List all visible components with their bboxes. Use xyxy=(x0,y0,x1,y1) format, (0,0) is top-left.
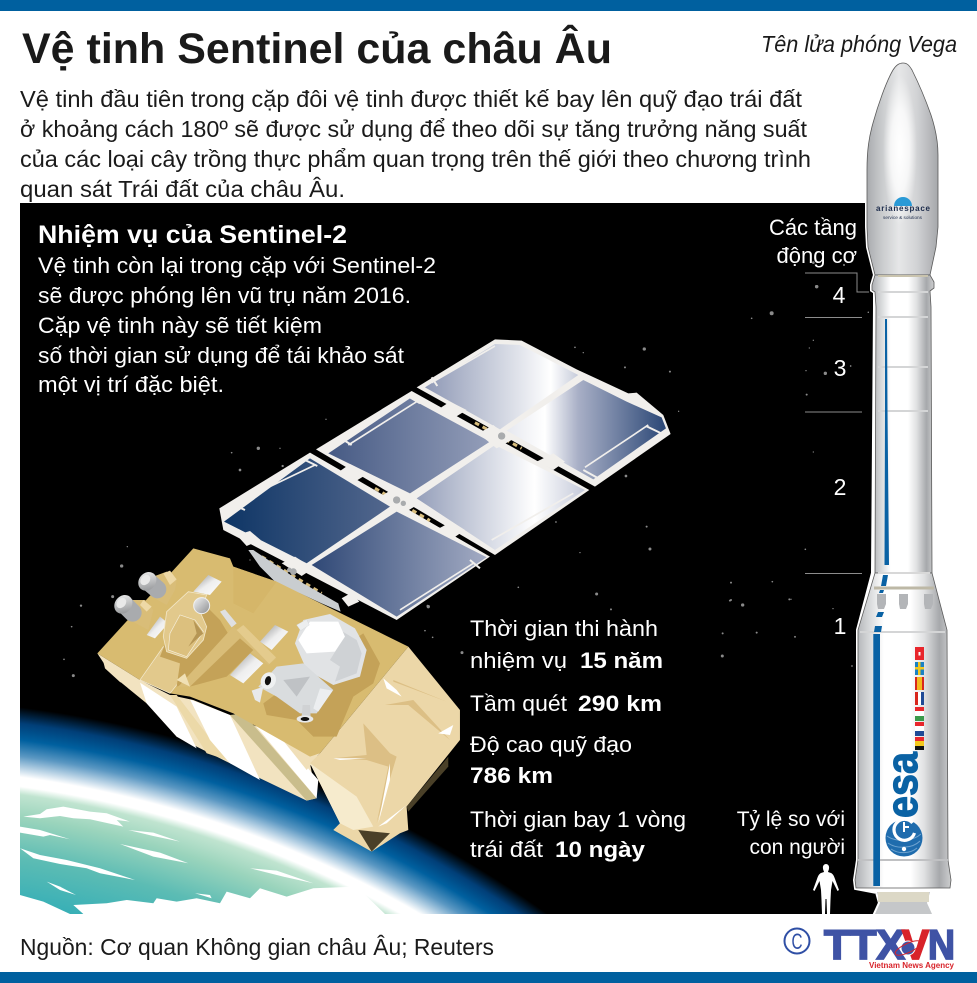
human scale label: Tỷ lệ so với xyxy=(737,808,845,831)
mirror mount xyxy=(163,592,207,658)
mission description: một vị trí đặc biệt. xyxy=(38,372,224,397)
stat: orbit altitude: Độ cao quỹ đạo xyxy=(470,732,632,757)
cross arm xyxy=(178,627,277,687)
esa wordmark: esa xyxy=(878,752,927,818)
stage numbers: 3 xyxy=(834,355,846,381)
intro paragraph: quan sát Trái đất của châu Âu. xyxy=(20,176,345,202)
stage numbers xyxy=(833,282,846,639)
right block xyxy=(310,647,460,852)
intro paragraph xyxy=(20,86,811,202)
stars xyxy=(63,261,869,867)
title: Vệ tinh Sentinel của châu Âu xyxy=(22,24,612,73)
mission description: sẽ được phóng lên vũ trụ năm 2016. xyxy=(38,283,411,308)
first stage xyxy=(855,573,951,888)
mission description xyxy=(38,253,436,397)
engine stages label: động cơ xyxy=(777,243,857,268)
stat: orbit altitude xyxy=(470,732,632,788)
stat: mission duration xyxy=(470,616,663,673)
slits xyxy=(147,575,288,683)
stat: swath width: Tầm quét xyxy=(470,691,567,716)
human scale label: con người xyxy=(749,836,845,859)
stat: orbit period xyxy=(470,807,686,862)
intro paragraph: ở khoảng cách 180º sẽ được sử dụng để theo dõi sự tăng trưởng năng suất xyxy=(20,116,808,142)
flags xyxy=(915,647,924,750)
stage numbers: 2 xyxy=(834,474,846,500)
mission heading: Nhiệm vụ của Sentinel-2 xyxy=(38,221,347,249)
stage leader lines xyxy=(805,273,869,574)
rocket xyxy=(855,63,951,914)
stat: orbit period: trái đất xyxy=(470,837,543,862)
mission description: Vệ tinh còn lại trong cặp với Sentinel-2 xyxy=(38,253,436,278)
rocket name label: Tên lửa phóng Vega xyxy=(761,31,957,57)
stat: swath width: 290 km xyxy=(578,691,662,716)
satellite body xyxy=(97,548,460,852)
bottom bar xyxy=(0,972,977,983)
top bar xyxy=(0,0,977,11)
rocket rings xyxy=(858,276,948,860)
copyright mark xyxy=(784,928,810,954)
agency tagline: Vietnam News Agency xyxy=(869,961,955,970)
blue stripe xyxy=(873,319,889,886)
top face xyxy=(97,548,408,757)
black space panel xyxy=(20,203,903,914)
wing 2 xyxy=(316,391,589,555)
solar array xyxy=(219,339,671,620)
mission description: Cặp vệ tinh này sẽ tiết kiệm xyxy=(38,313,322,338)
stat: mission duration: nhiệm vụ xyxy=(470,648,567,673)
human scale label xyxy=(737,808,845,859)
fairing highlight xyxy=(883,75,917,225)
mission description: số thời gian sử dụng để tái khảo sát xyxy=(38,343,404,368)
stage numbers: 4 xyxy=(833,282,846,308)
hinges xyxy=(237,402,565,607)
antenna strip xyxy=(248,550,341,612)
instrument shadows xyxy=(263,633,380,737)
globe emblem xyxy=(893,938,923,958)
fairing xyxy=(867,63,938,275)
wing 3 xyxy=(219,453,490,620)
stat: mission duration: 15 năm xyxy=(580,648,663,673)
esa logo xyxy=(886,819,922,856)
intro paragraph: của các loại cây trồng thực phẩm quan trọng trên thế giới theo chương trình xyxy=(20,146,811,172)
sensor unit xyxy=(252,663,333,723)
intro paragraph: Vệ tinh đầu tiên trong cặp đôi vệ tinh được thiết kế bay lên quỹ đạo trái đất xyxy=(20,86,803,112)
side panel xyxy=(97,653,320,801)
icon: human silhouette xyxy=(813,864,839,914)
earth xyxy=(20,690,903,914)
engine stages label: Các tầng xyxy=(769,215,857,240)
arianespace logo xyxy=(876,197,931,220)
earth clouds xyxy=(20,807,385,914)
source: Nguồn: Cơ quan Không gian châu Âu; Reuters xyxy=(20,934,494,960)
engine stages label xyxy=(769,215,857,268)
stat: swath width xyxy=(470,691,662,716)
agency logo xyxy=(784,921,955,970)
arianespace logo: arianespace xyxy=(876,204,931,213)
copyright mark: C xyxy=(792,929,803,954)
upper stages xyxy=(872,275,934,573)
arianespace logo: service & solutions xyxy=(883,215,923,220)
sensor dome xyxy=(295,614,367,685)
wing 1 xyxy=(417,339,671,487)
thrusters xyxy=(877,594,933,609)
N wordmark: N xyxy=(928,921,955,968)
TTX wordmark: TTX xyxy=(824,921,905,968)
nozzle xyxy=(875,892,932,914)
mission statistics xyxy=(470,616,686,862)
stat: orbit period: Thời gian bay 1 vòng xyxy=(470,807,686,832)
stat: orbit period: 10 ngày xyxy=(555,837,646,862)
stage numbers: 1 xyxy=(834,613,846,639)
stat: orbit altitude: 786 km xyxy=(470,763,553,788)
V wordmark in red: V xyxy=(902,921,929,968)
stat: mission duration: Thời gian thi hành xyxy=(470,616,658,641)
left cylinders xyxy=(111,568,177,630)
rocket outline xyxy=(855,63,951,914)
